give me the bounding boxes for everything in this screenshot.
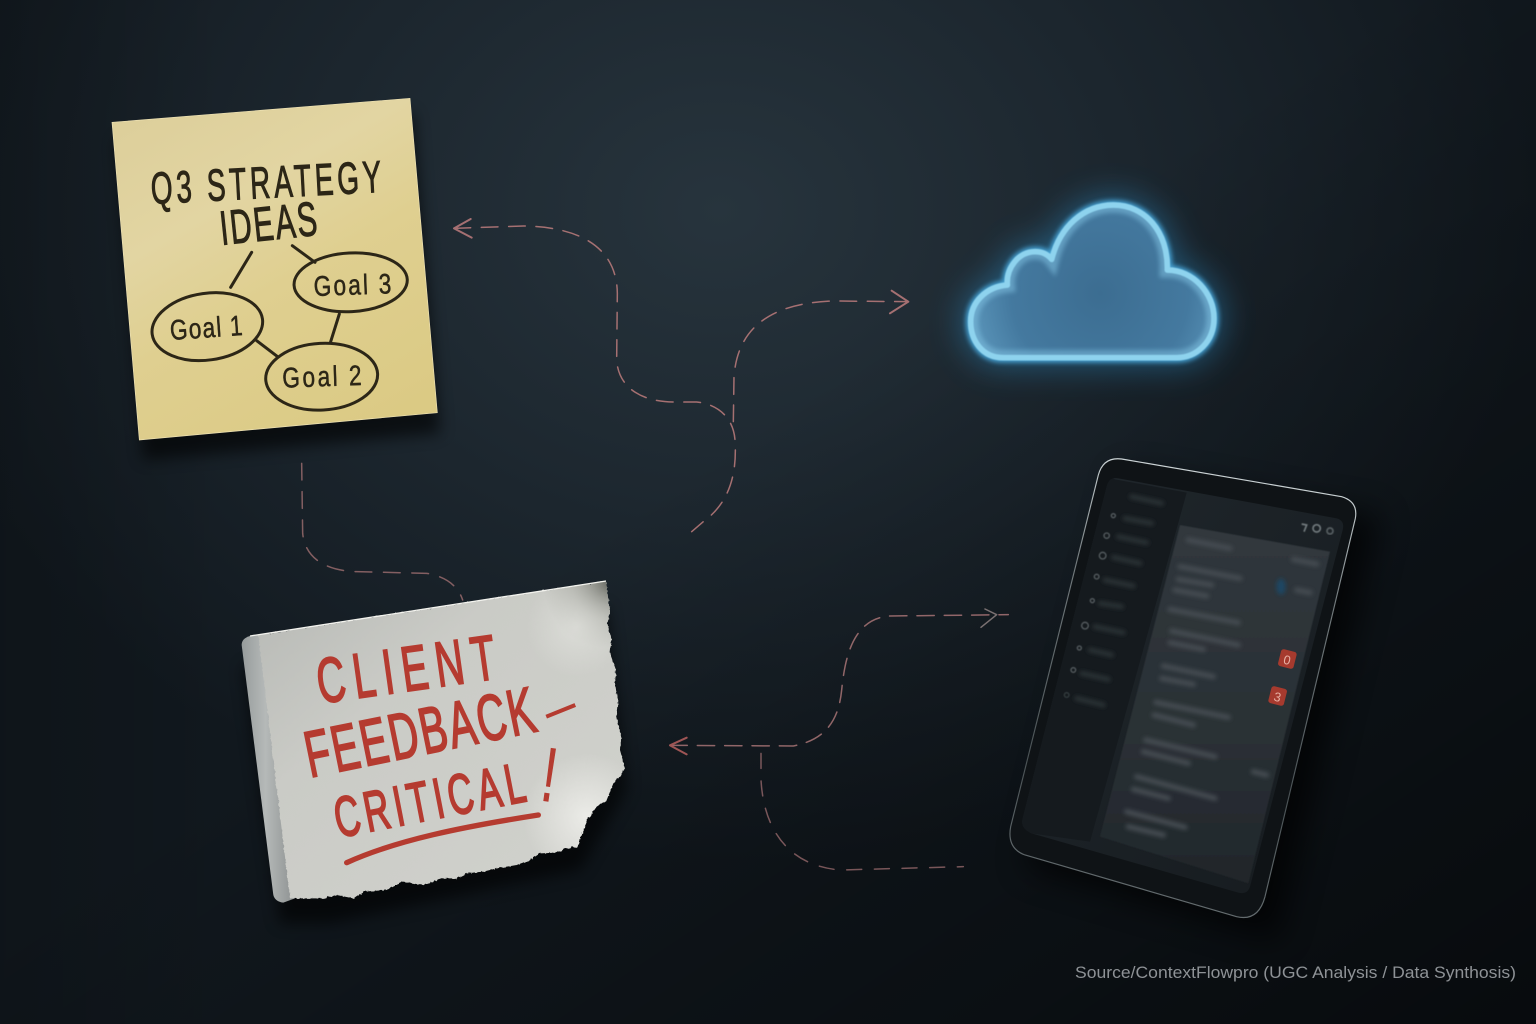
tablet showing dimmed app	[1010, 459, 1380, 940]
torn paper sheet	[258, 581, 625, 898]
top-right status icons	[1302, 524, 1333, 534]
red notification badge 3: 3	[1272, 690, 1282, 705]
handwritten red message	[298, 622, 580, 849]
glowing cloud icon	[971, 205, 1214, 358]
goal mind map: Goal 3	[313, 269, 392, 303]
source credit: Source/ContextFlowpro (UGC Analysis / Data Synthosis)	[1075, 963, 1516, 982]
handwritten red message: FEEDBACK	[298, 674, 542, 791]
note heading: IDEAS	[217, 192, 320, 256]
red notification badge 0	[1277, 649, 1297, 669]
blue status dot	[1276, 579, 1286, 595]
handwritten red message: !	[537, 733, 562, 819]
dashed arrow: tablet to client feedback note	[670, 609, 1008, 754]
handwritten red message: —	[540, 688, 580, 730]
blurred list rows	[1127, 540, 1317, 835]
notepad binding edge	[242, 634, 295, 903]
torn note: client feedback critical	[242, 581, 627, 923]
sidebar icons	[1064, 514, 1115, 697]
red underline	[347, 815, 538, 863]
dashed connector: tablet branch	[761, 753, 963, 870]
note heading: Q3 STRATEGY	[150, 151, 383, 214]
dashed arrow: centre junction to sticky note	[454, 219, 735, 532]
blurred sidebar labels	[1077, 497, 1162, 705]
goal mind map	[148, 246, 409, 413]
goal mind map: Goal 1	[169, 311, 243, 347]
handwritten red message: CLIENT	[312, 622, 500, 718]
handwritten red message: CRITICAL	[328, 750, 530, 849]
dashed arrow: centre junction to cloud	[733, 291, 908, 422]
dashed connector: sticky note to client feedback note	[302, 463, 463, 600]
yellow note paper	[112, 98, 437, 440]
tablet body	[1010, 459, 1356, 917]
red notification badge 3	[1268, 686, 1288, 706]
content panel	[1100, 525, 1330, 883]
tablet screen	[1022, 478, 1343, 893]
goal mind map: Goal 2	[282, 361, 362, 394]
red notification badge 0: 0	[1282, 653, 1292, 668]
note heading	[150, 151, 383, 256]
sticky note: Q3 strategy ideas	[112, 98, 440, 460]
sidebar column	[1022, 479, 1187, 842]
